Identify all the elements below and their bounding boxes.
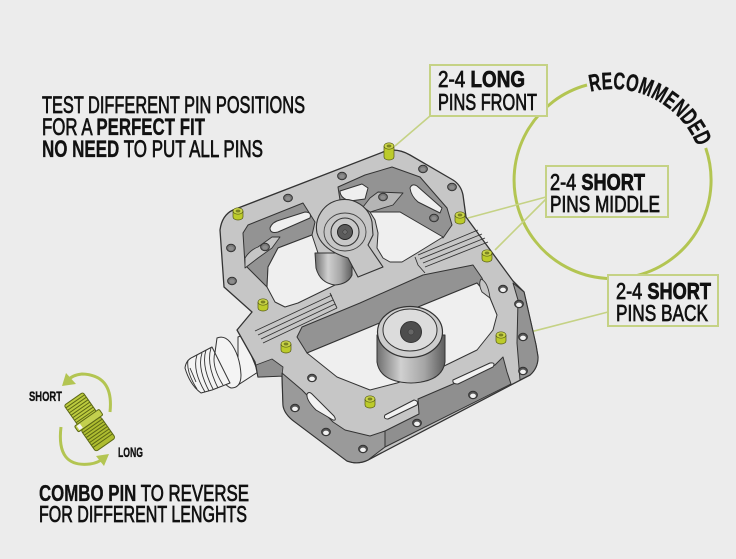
- leader lines: [395, 116, 608, 338]
- green pins: [233, 143, 506, 408]
- rotation arrow top: [67, 374, 110, 412]
- label short: SHORT: [29, 388, 62, 404]
- recommended circle: RECOMMENDED: [588, 72, 710, 144]
- illustration: flat pedal: [185, 143, 538, 463]
- left skirt: [282, 373, 385, 463]
- upper bearing body: [315, 253, 352, 285]
- callout: long pins front: [430, 65, 547, 116]
- callout: short pins back: PINS BACK: [616, 300, 708, 326]
- heading: test pin positions: FOR A PERFECT FIT: [42, 114, 205, 141]
- pedal body outline: [220, 150, 538, 463]
- front skirt: [385, 357, 511, 447]
- lower bearing: [377, 306, 445, 383]
- callout: short pins back: [608, 275, 718, 326]
- caption: combo pin: COMBO PIN TO REVERSE: [39, 480, 249, 506]
- pin body: [61, 390, 118, 453]
- upper left cavity: [243, 203, 315, 287]
- side slot: [480, 279, 490, 298]
- axle housing wedge: [256, 359, 283, 377]
- upper windows: [267, 184, 443, 307]
- label long: LONG: [118, 444, 143, 460]
- center boss and arm: [316, 199, 383, 277]
- pedal axle: [185, 335, 258, 393]
- lower window: [307, 283, 497, 390]
- right side wall: [513, 283, 538, 380]
- callout: long pins front: 2-4 LONG: [438, 66, 525, 92]
- caption: combo pin: FOR DIFFERENT LENGHTS: [39, 501, 247, 527]
- mounting holes: [227, 165, 527, 453]
- upper bearing cap: [324, 213, 366, 251]
- recommended circle: [512, 72, 713, 280]
- ribs: [255, 230, 488, 343]
- arch details: [245, 237, 280, 268]
- callout: short pins middle: 2-4 SHORT: [550, 169, 645, 195]
- caption: combo pin: [39, 480, 249, 527]
- rotation arrow bottom: [60, 427, 104, 464]
- lower slots: [307, 363, 494, 420]
- heading: test pin positions: TEST DIFFERENT PIN POSITIONS: [42, 92, 305, 119]
- upper right cavity: [338, 167, 452, 238]
- callout: short pins back: 2-4 SHORT: [616, 278, 711, 304]
- lower cavity wall: [297, 265, 494, 353]
- heading: test pin positions: NO NEED TO PUT ALL PINS: [42, 136, 263, 163]
- callout: short pins middle: PINS MIDDLE: [550, 191, 660, 217]
- icon: reversible combo pin: [29, 373, 143, 466]
- callout: long pins front: PINS FRONT: [438, 89, 537, 115]
- callout: short pins middle: [546, 166, 668, 217]
- heading: test pin positions: [42, 92, 305, 163]
